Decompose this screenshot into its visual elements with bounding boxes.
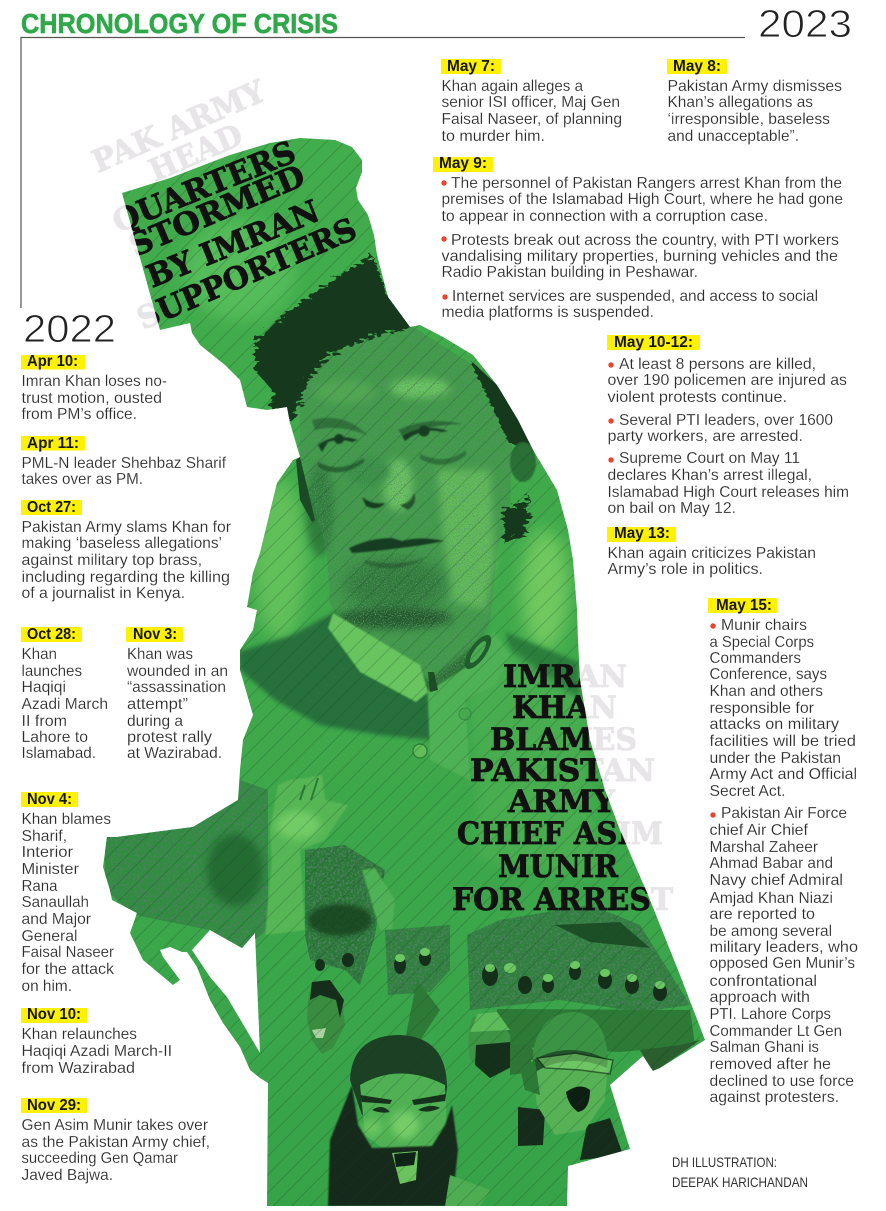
entry: Nov 10	[21, 1006, 172, 1077]
entry: Oct 27	[21, 499, 232, 602]
entry: Nov 3: Khan was	[127, 646, 193, 663]
headline in black: army headquarters: SUPPORTERS	[132, 211, 362, 337]
entry: May 15: approach with	[710, 989, 810, 1006]
entry: May 13: Khan again criticizes Pakistan	[608, 545, 816, 562]
entry: May 8	[667, 58, 842, 145]
entry: May 15: Munir chairs	[721, 617, 807, 634]
headline in black: Khan blames: ARMY	[507, 784, 616, 820]
year 2023: 2023	[758, 3, 852, 46]
entry: May 15: Salman Ghani is	[710, 1039, 819, 1056]
entry: Apr 10: Apr 10:	[27, 353, 78, 370]
entry: May 9: to appear in connection with a corruption case.	[442, 208, 768, 225]
entry: May 15: confrontational	[710, 973, 817, 990]
second raised arm	[362, 868, 395, 930]
entry: Nov 3: protest rally	[127, 729, 212, 746]
jacket	[238, 612, 432, 740]
entry: May 15: chief Air Chief	[710, 822, 809, 839]
entry: Nov 29	[21, 1097, 210, 1184]
illustration credit	[672, 1154, 808, 1190]
entry: Nov 10: Haqiqi Azadi March-II	[22, 1043, 172, 1060]
entry: May 15: Navy chief Admiral	[710, 872, 843, 889]
entry: Nov 29: succeeding Gen Qamar	[22, 1150, 179, 1167]
entry: Nov 10: Khan relaunches	[22, 1026, 137, 1043]
headline in black: Khan blames: FOR ARREST	[452, 882, 673, 918]
headline in black: Khan blames: BLAMES	[490, 722, 637, 758]
entry: Apr 10: Imran Khan loses no-	[22, 373, 167, 390]
entry: May 15: are reported to	[710, 906, 815, 923]
entry: May 10-12: May 10-12:	[614, 334, 693, 351]
entry: May 10-12: violent protests continue.	[608, 389, 787, 406]
entry: May 10-12: Several PTI leaders, over 1600	[619, 412, 833, 429]
entry: May 8: May 8:	[673, 58, 721, 75]
background headline ghost text: army headquarters: STORMED	[124, 158, 310, 264]
entry: May 8: and unacceptable”.	[668, 128, 799, 145]
entry: Nov 4: Sanaullah	[22, 894, 89, 911]
entry: Nov 29: Nov 29:	[27, 1097, 81, 1114]
headline in black: Khan blames: MUNIR	[498, 849, 618, 885]
entry: May 10-12: over 190 policemen are injured as	[608, 372, 847, 389]
raised hand	[265, 775, 348, 935]
entry: May 15: Ahmad Babar and	[710, 855, 833, 872]
entry: Nov 29: Javed Bajwa.	[22, 1167, 113, 1184]
hatch lines	[100, 130, 720, 1210]
entry: May 10-12: Supreme Court on May 11	[619, 450, 800, 467]
headline in black: Khan blames: PAKISTAN	[470, 753, 655, 789]
entry: May 10-12: declares Khan’s arrest illegal,	[608, 467, 812, 484]
entry: May 7	[441, 58, 622, 145]
entry: May 9: May 9:	[439, 155, 487, 172]
entry: Nov 4: Khan blames	[22, 811, 111, 828]
entry: May 15: Army Act and Official	[710, 766, 857, 783]
entry: Nov 4: Nov 4:	[27, 791, 72, 808]
entry: May 15: facilities will be tried	[710, 733, 856, 750]
background headline ghost text: army headquarters: PAK ARMY	[87, 73, 272, 180]
brows and eyes	[312, 418, 466, 568]
trees behind protest crowd	[105, 780, 385, 985]
entry: May 9: Radio Pakistan building in Peshawar.	[442, 264, 698, 281]
entry: Nov 10: from Wazirabad	[22, 1060, 135, 1077]
entry: Apr 10: trust motion, ousted	[22, 390, 162, 407]
entry: Nov 3: Nov 3:	[133, 626, 177, 643]
entry: Oct 27: making ‘baseless allegations’	[22, 535, 222, 552]
entry: Apr 10	[21, 353, 167, 423]
entry: May 15: be among several	[710, 923, 832, 940]
background headline ghost text: Khan blames: PAKISTAN	[470, 753, 655, 789]
background headline ghost text: Khan blames: ARMY	[507, 784, 616, 820]
background headline ghost text: army headquarters	[87, 73, 362, 337]
entry: May 15: a Special Corps	[710, 634, 814, 651]
timeline frame	[21, 38, 745, 308]
entry: Nov 4: Sharif,	[22, 828, 67, 845]
entry: May 15: attacks on military	[710, 716, 839, 733]
entry: May 10-12	[607, 334, 849, 517]
entry: Nov 3: “assassination	[127, 679, 226, 696]
entry: May 15: Amjad Khan Niazi	[710, 890, 833, 907]
headline in black: army headquarters: QUARTERS	[108, 134, 301, 240]
entry: May 10-12: At least 8 persons are killed,	[619, 356, 816, 373]
entry: Apr 10: from PM’s office.	[22, 406, 137, 423]
entry: May 9: Internet services are suspended, and access to social	[452, 288, 818, 305]
background headline ghost text: army headquarters: QUARTERS	[108, 134, 301, 240]
entry: Oct 28: Lahore to	[22, 729, 88, 746]
entry: Oct 28: Azadi March	[22, 696, 108, 713]
entry: Nov 4: Minister	[22, 861, 80, 878]
entry: May 7: senior ISI officer, Maj Gen	[442, 94, 620, 111]
entry: Oct 28: II from	[22, 713, 67, 730]
entry: Nov 4: General	[22, 928, 78, 945]
face	[300, 327, 512, 687]
headline in black: army headquarters: STORMED	[124, 158, 310, 264]
entry: May 15: declined to use force	[710, 1073, 854, 1090]
entry: Oct 27: including regarding the killing	[22, 569, 230, 586]
entry: Nov 4	[21, 791, 115, 995]
entry: May 15: Conference, says	[710, 666, 827, 683]
illustration credit: DH ILLUSTRATION:	[672, 1154, 777, 1170]
entry: May 10-12: on bail on May 12.	[608, 500, 736, 517]
entry: Nov 4: Rana	[22, 878, 58, 895]
entry: May 15: Pakistan Air Force	[721, 805, 847, 822]
entry: May 9	[433, 155, 843, 321]
entry: May 13: May 13:	[614, 525, 670, 542]
entry: May 9: media platforms is suspended.	[442, 304, 654, 321]
protester: bearded man	[328, 1035, 490, 1206]
entry: Nov 29: Gen Asim Munir takes over	[22, 1117, 209, 1134]
entry: May 8: ‘irresponsible, baseless	[668, 111, 830, 128]
entry: Oct 28	[21, 626, 108, 762]
entry: May 13: Army’s role in politics.	[608, 561, 763, 578]
illustration: Imran Khan silhouette collage	[100, 130, 720, 1210]
entry: May 15: under the Pakistan	[710, 750, 841, 767]
background headline ghost text: Khan blames: KHAN	[512, 690, 617, 726]
protester: masked man	[468, 1017, 510, 1076]
entry: May 15: PTI. Lahore Corps	[710, 1006, 831, 1023]
entry: May 9: premises of the Islamabad High Court, where he had gone	[442, 191, 843, 208]
entry: May 15: opposed Gen Munir’s	[710, 955, 855, 972]
entry: May 10-12: Islamabad High Court releases him	[608, 484, 849, 501]
entry: May 15: responsible for	[710, 700, 815, 717]
collar and buttons	[328, 613, 428, 702]
entry: May 9: vandalising military properties, burning vehicles and the	[442, 248, 838, 265]
entry: Nov 4: and Major	[22, 911, 92, 928]
entry: Oct 27: of a journalist in Kenya.	[22, 585, 185, 602]
background headline ghost text: army headquarters: SUPPORTERS	[132, 211, 362, 337]
background headline ghost text: Khan blames: FOR ARREST	[452, 882, 673, 918]
entry: Nov 10: Nov 10:	[27, 1006, 81, 1023]
entry: Nov 3: attempt”	[127, 696, 188, 713]
entry: May 15: removed after he	[710, 1056, 831, 1073]
protester: small face	[307, 982, 345, 1054]
background headline ghost text: Khan blames	[452, 659, 673, 918]
entry: Oct 28: Oct 28:	[27, 626, 76, 643]
entry: May 15: Secret Act.	[710, 783, 786, 800]
entry: May 7: May 7:	[447, 58, 495, 75]
entry: Nov 4: Faisal Naseer	[22, 944, 115, 961]
entry: Nov 3: at Wazirabad.	[127, 745, 222, 762]
entry: Oct 27: Oct 27:	[27, 499, 76, 516]
entry: May 15: Commanders	[710, 650, 801, 667]
headline in black: Khan blames	[453, 664, 650, 911]
hair	[256, 255, 537, 542]
entry: Oct 28: Khan	[22, 646, 57, 663]
year 2022: 2022	[23, 308, 116, 351]
entry: May 13	[607, 525, 816, 578]
title: CHRONOLOGY OF CRISIS	[21, 8, 338, 39]
entry: Nov 3	[126, 626, 228, 762]
headline in black: Khan blames: CHIEF ASIM	[457, 816, 663, 852]
entry: Oct 27: against military top brass,	[22, 552, 202, 569]
background headline ghost text: army headquarters: BY IMRAN	[142, 193, 325, 295]
entry: May 15: May 15:	[716, 597, 772, 614]
entry: May 9: The personnel of Pakistan Rangers arrest Khan from the	[451, 175, 842, 192]
headline in black: army headquarters	[125, 141, 356, 324]
background headline ghost text: Khan blames: CHIEF ASIM	[457, 816, 663, 852]
entry: May 15: military leaders, who	[710, 939, 858, 956]
entry: Nov 3: wounded in an	[126, 663, 228, 680]
headline in black: Khan blames: KHAN	[512, 690, 617, 726]
entry: May 15: against protesters.	[710, 1089, 839, 1106]
illustration credit: DEEPAK HARICHANDAN	[672, 1174, 808, 1190]
entry: Nov 4: on him.	[22, 978, 72, 995]
entry: May 15: Commander Lt Gen	[710, 1023, 842, 1040]
entry: Apr 11	[21, 435, 227, 488]
entry: Nov 4: for the attack	[22, 961, 115, 978]
entry: Apr 11: PML-N leader Shehbaz Sharif	[22, 455, 227, 472]
entry: Oct 28: Islamabad.	[22, 745, 96, 762]
headline in black: Khan blames: IMRAN	[503, 659, 627, 695]
background headline ghost text: army headquarters: HEAD	[144, 117, 248, 189]
headline in black: army headquarters: BY IMRAN	[142, 193, 325, 295]
entry: Nov 3: during a	[127, 713, 183, 730]
entry: May 8: Pakistan Army dismisses	[668, 78, 842, 95]
protest crowd	[315, 905, 700, 1071]
background headline ghost text: Khan blames: MUNIR	[498, 849, 618, 885]
entry: May 15: Marshal Zaheer	[710, 839, 819, 856]
entry: Nov 4: Interior	[22, 844, 74, 861]
entry: Nov 29: as the Pakistan Army chief,	[22, 1134, 210, 1151]
entry: Apr 11: takes over as PM.	[22, 471, 143, 488]
entry: May 7: Faisal Naseer, of planning	[442, 111, 622, 128]
background headline ghost text: Khan blames: IMRAN	[503, 659, 627, 695]
entry: May 8: Khan’s allegations as	[668, 94, 813, 111]
entry: Oct 28: Haqiqi	[22, 679, 66, 696]
entry: Apr 11: Apr 11:	[27, 435, 79, 452]
entry: May 7: to murder him.	[442, 128, 545, 145]
entry: May 10-12: party workers, are arrested.	[608, 428, 803, 445]
entry: May 9: Protests break out across the country, with PTI workers	[451, 232, 839, 249]
background headline ghost text: Khan blames: BLAMES	[490, 722, 637, 758]
entry: Oct 27: Pakistan Army slams Khan for	[22, 519, 232, 536]
entry: May 7: Khan again alleges a	[442, 78, 583, 95]
entry: May 15	[708, 597, 858, 1106]
entry: May 15: Khan and others	[710, 683, 823, 700]
entry: Oct 28: launches	[22, 663, 82, 680]
protester: boy with glasses	[518, 1012, 623, 1160]
